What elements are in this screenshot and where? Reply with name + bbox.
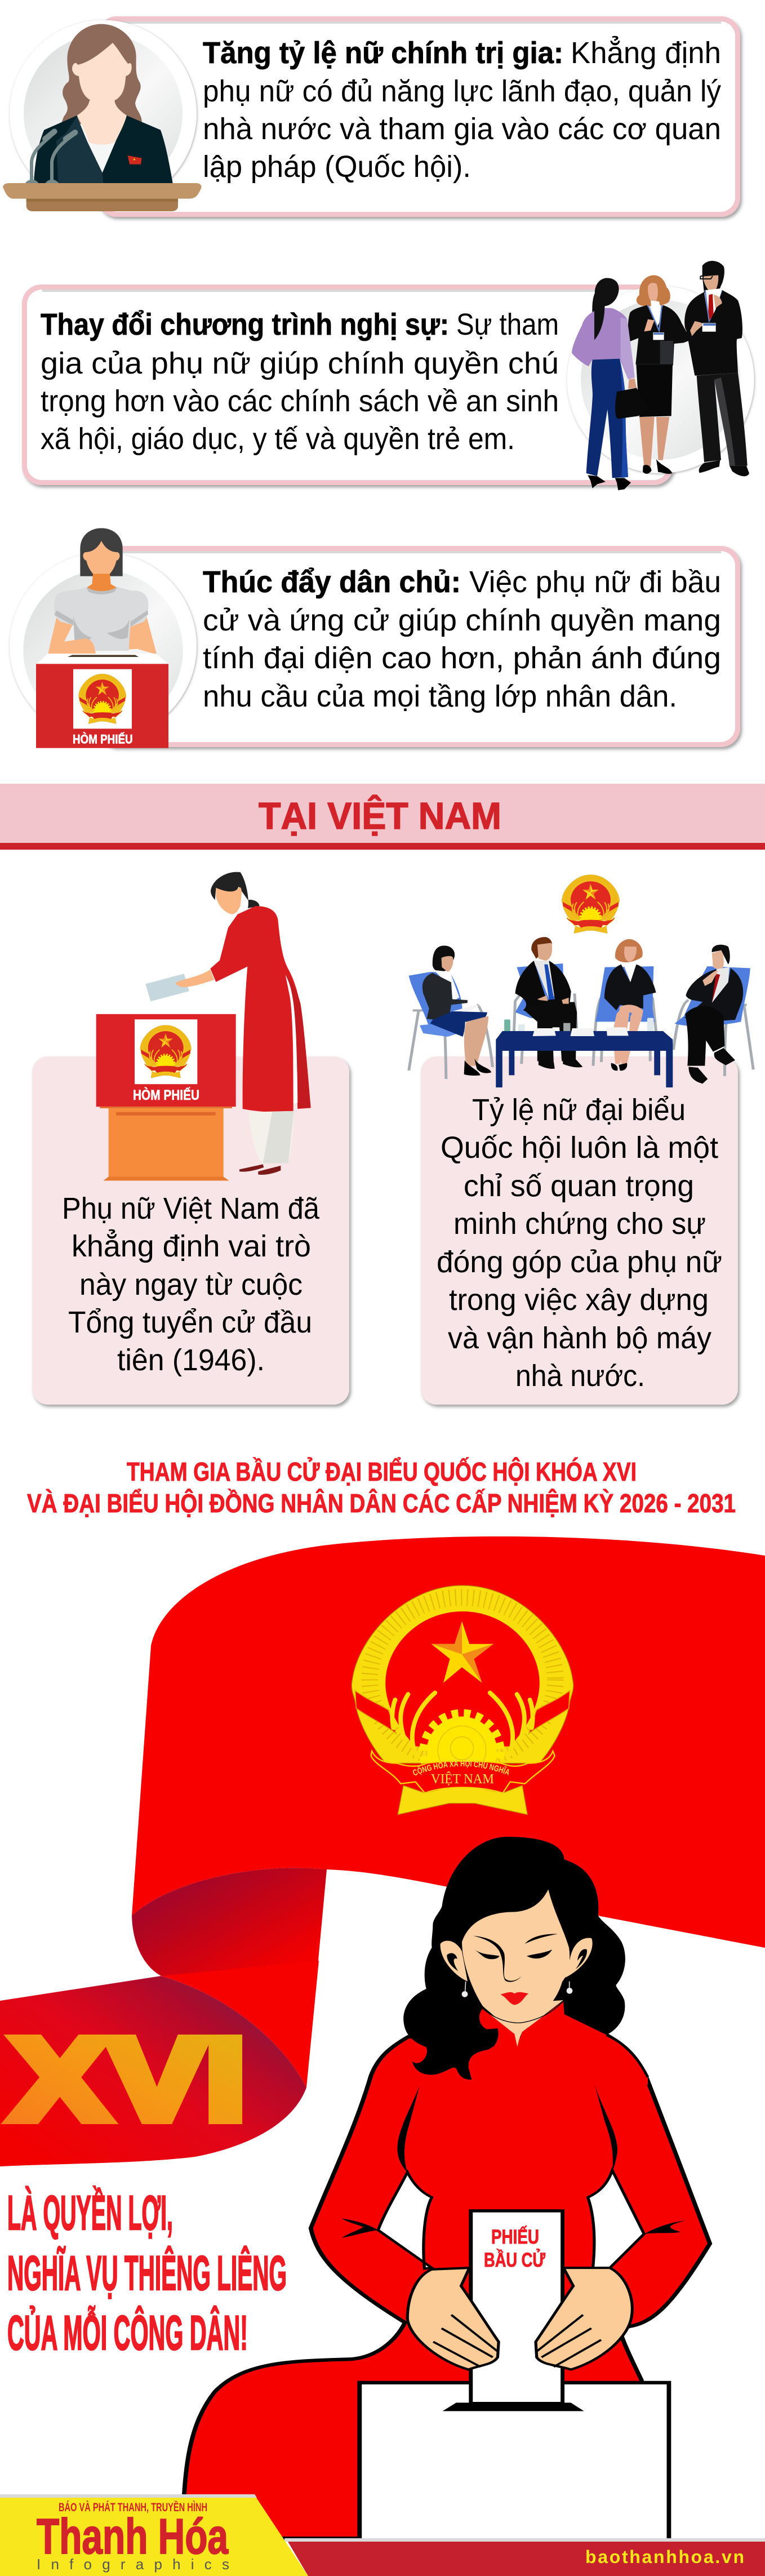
text: website: baothanhhoa.vn <box>585 2547 744 2567</box>
panel: women politicians card <box>97 16 740 217</box>
icon: woman in ao dai voting <box>96 872 311 1180</box>
text: XVI: XVI <box>11 2015 246 2144</box>
icon: woman speaker at podium <box>3 20 202 211</box>
icon: delegates at table <box>409 937 753 1087</box>
icon: emblem small <box>78 674 126 724</box>
flag: waving red flag <box>0 1536 765 2166</box>
text: democracy: Thúc đẩy dân chủ: <box>203 565 461 599</box>
text: women politicians: nhà nước và tham gia vào các cơ quan <box>203 112 721 146</box>
text: women politicians: Khẳng định <box>571 36 721 70</box>
ballot box, ballot and hands <box>359 2211 669 2541</box>
text: right card: chỉ số quan trọng <box>464 1169 694 1203</box>
text: democracy: nhu cầu của mọi tầng lớp nhân dân. <box>203 679 677 713</box>
panel: left Vietnam card <box>32 1056 349 1405</box>
text: agenda: Sự tham <box>456 308 559 341</box>
text: right card: Quốc hội luôn là một <box>441 1131 718 1165</box>
icon: emblem on ballot box <box>140 1025 191 1078</box>
banner: TẠI VIỆT NAM <box>0 784 765 850</box>
footer: logo <box>0 2494 308 2576</box>
text: emblem motto: CỘNG HÒA XÃ HỘI CHỦ NGHĨA <box>413 1759 509 1775</box>
footer: logo: BÁO VÀ PHÁT THANH, TRUYỀN HÌNH <box>59 2501 207 2514</box>
text: agenda: Thay đổi chương trình nghị sự: <box>41 308 449 341</box>
icon: woman at ballot box <box>10 528 197 748</box>
text: agenda <box>41 308 559 456</box>
text: emblem name: VIỆT NAM <box>431 1772 494 1787</box>
ballot text: PHIẾU <box>491 2226 539 2248</box>
text: democracy: cử và ứng cử giúp chính quyền mang <box>203 603 721 637</box>
text: women politicians: phụ nữ có đủ năng lực lãnh đạo, quản lý <box>203 74 721 108</box>
text: right card: minh chứng cho sự <box>453 1207 706 1241</box>
text: right card: và vận hành bộ máy <box>448 1321 711 1355</box>
heading: TẠI VIỆT NAM <box>259 795 501 837</box>
infographic canvas: NGHĨA VỤ THIÊNG LIÊNG <box>7 2246 287 2300</box>
label: ballot box: HÒM PHIẾU <box>73 732 133 746</box>
text: left card <box>62 1192 320 1377</box>
ballot text <box>484 2226 546 2271</box>
footer: red bar <box>284 2538 765 2576</box>
footer: logo: Thanh Hóa <box>37 2508 229 2564</box>
text: agenda: gia của phụ nữ giúp chính quyền chú <box>41 347 559 380</box>
dress <box>183 2035 710 2538</box>
text: democracy <box>203 565 721 713</box>
slogan: CỦA MỖI CÔNG DÂN! <box>7 2306 248 2360</box>
label: ballot box caption: HÒM PHIẾU <box>133 1086 199 1103</box>
title: election heading: THAM GIA BẦU CỬ ĐẠI BIỂU QUỐC HỘI KHÓA XVI <box>127 1457 637 1486</box>
footer: logo: Infographics <box>37 2556 229 2573</box>
slogan <box>7 2186 287 2360</box>
text: left card: Phụ nữ Việt Nam đã <box>62 1192 320 1225</box>
text: women politicians: lập pháp (Quốc hội). <box>203 150 471 184</box>
head and hair <box>403 1837 648 2085</box>
title: election heading <box>27 1457 736 1518</box>
text: left card: tiên (1946). <box>117 1343 265 1377</box>
text: agenda: trọng hơn vào các chính sách về an sinh <box>41 384 559 418</box>
icon: national emblem on flag <box>352 1585 573 1815</box>
illustration: woman in red ao dai casting ballot <box>183 1837 710 2541</box>
text: democracy: Việc phụ nữ đi bầu <box>469 565 721 599</box>
panel: right Vietnam card <box>421 1056 738 1405</box>
text: left card: khẳng định vai trò <box>72 1229 311 1263</box>
icon: national emblem above delegates <box>562 875 620 934</box>
text: right card: trong việc xây dựng <box>449 1283 709 1317</box>
text: right card <box>437 1093 722 1393</box>
text: left card: này ngay từ cuộc <box>79 1268 303 1302</box>
text: right card: Tỷ lệ nữ đại biểu <box>472 1093 686 1127</box>
panel: agenda card <box>22 285 673 485</box>
text: left card: Tổng tuyển cử đầu <box>68 1305 312 1339</box>
text: democracy: tính đại diện cao hơn, phản ánh đúng <box>203 641 721 675</box>
panel: democracy card <box>97 546 740 747</box>
ballot text: BẦU CỬ <box>484 2249 546 2271</box>
icon: three delegates talking <box>567 261 754 490</box>
text: right card: đóng góp của phụ nữ <box>437 1245 722 1279</box>
text: right card: nhà nước. <box>515 1359 645 1393</box>
text: agenda: xã hội, giáo dục, y tế và quyền trẻ em. <box>41 422 515 456</box>
slogan: LÀ QUYỀN LỢI, <box>7 2186 173 2240</box>
text: women politicians <box>203 36 721 184</box>
text: women politicians: Tăng tỷ lệ nữ chính trị gia: <box>203 36 563 70</box>
